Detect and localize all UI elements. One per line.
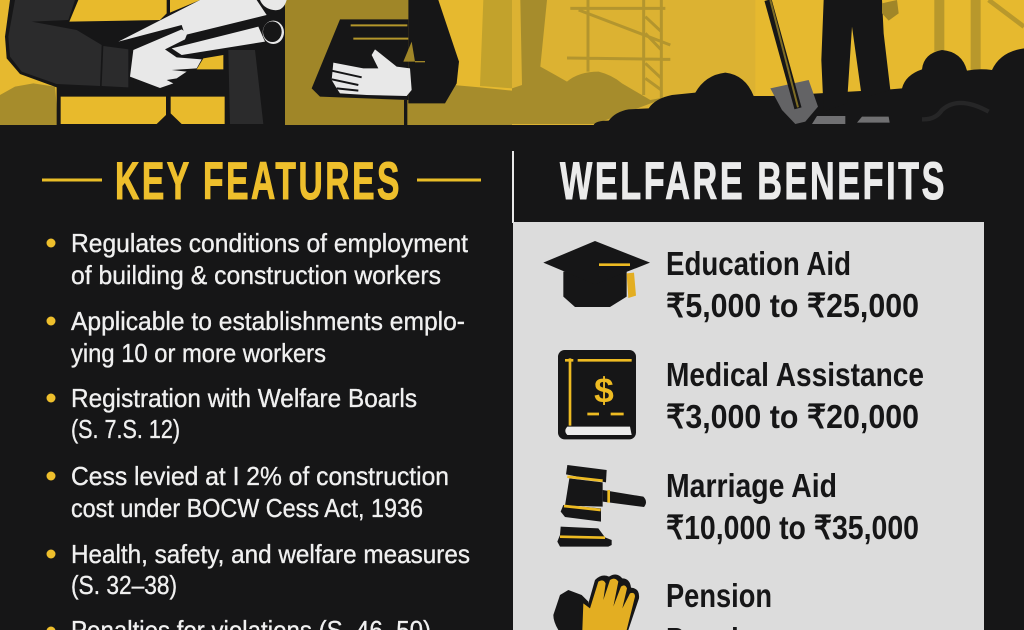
- glove: [882, 0, 899, 21]
- benefit: medical assistance: Medical Assistance: [666, 356, 924, 393]
- feature: cess: cost under BOCW Cess Act, 1936: [71, 493, 423, 523]
- left figure: officer holding blueprints: [0, 0, 512, 125]
- shovel: [768, 0, 818, 124]
- panel: welfare benefits: [512, 151, 984, 630]
- benefit: education aid: Education Aid: [666, 245, 851, 282]
- benefit: education aid: ₹5,000 to ₹25,000: [666, 287, 919, 324]
- benefit: pension: [553, 575, 772, 630]
- feature: regulates conditions: [46, 228, 469, 290]
- benefit: education aid: [543, 241, 919, 324]
- feature: registration: (S. 7.S. 12): [71, 414, 180, 444]
- feature list: [46, 228, 470, 630]
- right figure: dark arm and book: [312, 0, 459, 125]
- icon: gavel: [557, 465, 646, 547]
- benefit: medical assistance: [558, 350, 924, 439]
- benefit: marriage aid: Marriage Aid: [666, 467, 837, 504]
- feature: registration: Registration with Welfare Boarls: [71, 383, 417, 413]
- icon: graduation cap: [543, 241, 650, 307]
- left white hand: [130, 29, 202, 88]
- feature: health and safety: Health, safety, and welfare measures: [71, 539, 470, 569]
- feature: cess: [46, 461, 449, 523]
- feature: applicability: [46, 306, 465, 368]
- benefit: medical assistance: ₹3,000 to ₹20,000: [666, 398, 919, 435]
- benefit: pension: Pension: [666, 577, 772, 614]
- panel: key features: [42, 152, 481, 630]
- feature: regulates conditions: of building & construction workers: [71, 260, 441, 290]
- feature: registration: [46, 383, 417, 444]
- feature: regulates conditions: Regulates conditions of employment: [71, 228, 469, 258]
- feature: health and safety: (S. 32–38): [71, 570, 177, 600]
- worker legs: [821, 0, 890, 112]
- icon: medical ledger book: $: [594, 372, 614, 411]
- heading: key features: KEY FEATURES: [115, 152, 402, 211]
- benefit: marriage aid: ₹10,000 to ₹35,000: [666, 509, 919, 546]
- feature: health and safety: [46, 539, 470, 600]
- icon: medical ledger book: [558, 350, 636, 439]
- background scaffold and silhouette: [512, 0, 1024, 125]
- feature: cess: Cess levied at I 2% of construction: [71, 461, 449, 491]
- ground mound, worker legs and shovel: [594, 0, 1024, 130]
- icon: work gloves: [553, 575, 639, 630]
- benefit: marriage aid: [557, 465, 919, 547]
- header illustration: construction workers: [0, 0, 1024, 130]
- feature: applicability: Applicable to establishments emplo-: [71, 306, 465, 336]
- feature: applicability: ying 10 or more workers: [71, 338, 326, 368]
- blueprint scrolls: [118, 0, 287, 55]
